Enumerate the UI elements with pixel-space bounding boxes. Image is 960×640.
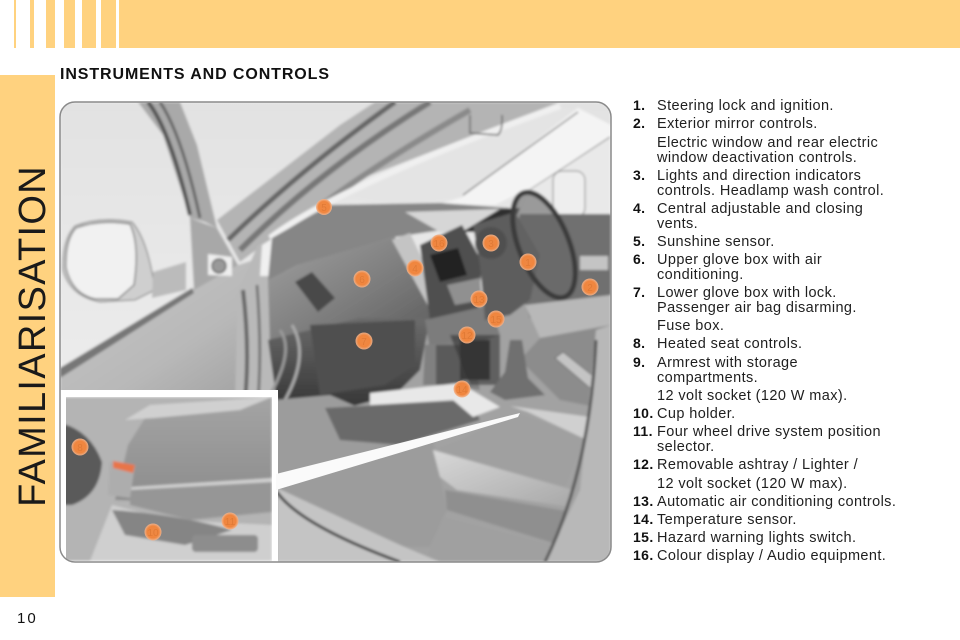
inset: seat belt buckle — [108, 461, 135, 498]
marker 1 — [520, 254, 536, 270]
legend: numbered list of controls: Armrest with storage — [657, 355, 798, 371]
strip beside display — [391, 232, 430, 306]
legend: numbered list of controls: 7. — [633, 284, 645, 300]
legend: numbered list of controls: Temperature sensor. — [657, 512, 797, 528]
legend: numbered list of controls: 13. — [633, 493, 654, 509]
marker 5: 5 — [321, 203, 327, 214]
door frame strip — [235, 246, 275, 390]
legend: numbered list of controls: 6. — [633, 251, 645, 267]
page number: 10 — [17, 610, 38, 627]
illustration: car interior — [59, 101, 612, 563]
door panel — [60, 260, 252, 390]
legend: numbered list of controls: 4. — [633, 200, 645, 216]
white beam from inset — [276, 413, 520, 490]
steering column — [473, 212, 540, 320]
legend: numbered list of controls: Exterior mirror controls. — [657, 116, 818, 132]
legend: numbered list of controls: vents. — [657, 216, 698, 232]
legend: numbered list of controls: conditioning. — [657, 267, 744, 283]
marker 7: 7 — [361, 337, 367, 348]
title: INSTRUMENTS AND CONTROLS — [60, 66, 330, 83]
marker 2: 2 — [587, 283, 593, 294]
marker 8: 8 — [77, 443, 83, 454]
far side window and mirror — [530, 157, 586, 215]
header band with stripes — [14, 0, 960, 48]
legend: numbered list of controls: 5. — [633, 233, 645, 249]
legend: numbered list of controls: Removable ashtray / Lighter / — [657, 457, 858, 473]
inset: console with cup holder — [90, 505, 272, 561]
roof pillar — [217, 102, 560, 262]
illustration frame — [60, 102, 611, 562]
door pillar — [138, 102, 238, 290]
legend: numbered list of controls: Lower glove box with lock. — [657, 285, 837, 301]
interior base tone — [270, 300, 611, 562]
marker 3: 3 — [488, 239, 494, 250]
rear view mirror — [470, 115, 502, 135]
marker 12 — [458, 326, 476, 344]
legend: numbered list of controls: Steering lock and ignition. — [657, 98, 834, 114]
seat back area — [433, 413, 585, 487]
outside view background — [60, 102, 610, 366]
sidebar with section name — [0, 75, 55, 597]
marker 16: 16 — [433, 239, 445, 250]
marker 10 — [144, 524, 162, 540]
legend: numbered list of controls: Electric window and rear electric — [657, 135, 878, 151]
legend: numbered list of controls: Hazard warning lights switch. — [657, 530, 856, 546]
legend: numbered list of controls: window deactivation controls. — [657, 150, 857, 166]
marker 15: 15 — [490, 315, 502, 326]
marker 2 — [582, 278, 598, 296]
dashboard top — [268, 203, 510, 280]
marker 4 — [406, 260, 424, 276]
legend: numbered list of controls: 1. — [633, 97, 645, 113]
seat cushion — [433, 450, 573, 543]
marker 13 — [470, 290, 488, 308]
marker 14 — [454, 380, 470, 398]
glove box upper — [268, 237, 435, 345]
legend: numbered list of controls: controls. Headlamp wash control. — [657, 183, 884, 199]
steering wheel — [510, 188, 579, 301]
marker 16 — [430, 234, 448, 252]
marker 11 — [222, 512, 238, 530]
footwell console — [325, 335, 500, 445]
lower dash — [267, 319, 428, 407]
central stack — [420, 225, 500, 390]
inset: armrest close-up — [60, 397, 272, 561]
marker 5 — [316, 199, 332, 215]
legend: numbered list of controls: Four wheel drive system position — [657, 424, 881, 440]
legend: numbered list of controls: 14. — [633, 511, 654, 527]
inset: steering wheel rim — [60, 423, 102, 505]
marker 8 — [72, 438, 88, 456]
legend: numbered list of controls: 2. — [633, 115, 645, 131]
legend: numbered list of controls: Automatic air conditioning controls. — [657, 494, 896, 510]
legend: numbered list of controls: 3. — [633, 167, 645, 183]
legend: numbered list of controls: Sunshine sensor. — [657, 234, 775, 250]
legend: numbered list of controls: Passenger air bag disarming. — [657, 300, 857, 316]
legend: numbered list of controls: Fuse box. — [657, 318, 724, 334]
legend: numbered list of controls — [633, 97, 896, 564]
marker 3 — [482, 234, 500, 252]
legend: numbered list of controls: 15. — [633, 529, 654, 545]
legend: numbered list of controls: 11. — [633, 423, 653, 439]
marker 1: 1 — [525, 258, 531, 269]
legend: numbered list of controls: 16. — [633, 547, 654, 563]
legend: numbered list of controls: Lights and direction indicators — [657, 168, 861, 184]
legend: numbered list of controls: 9. — [633, 354, 645, 370]
sill left — [277, 488, 440, 562]
marker 15 — [488, 310, 504, 328]
legend: numbered list of controls: 12 volt socket (120 W max). — [657, 388, 848, 404]
legend: numbered list of controls: Heated seat controls. — [657, 336, 802, 352]
marker 11: 11 — [225, 517, 236, 528]
exterior mirror — [63, 220, 186, 302]
marker 14: 14 — [456, 385, 468, 396]
legend: numbered list of controls: selector. — [657, 439, 715, 455]
carpet — [278, 394, 355, 421]
legend: numbered list of controls: 12 volt socket (120 W max). — [657, 476, 848, 492]
legend: numbered list of controls: 12. — [633, 456, 654, 472]
marker 6: 6 — [359, 275, 365, 286]
armrest top — [510, 406, 590, 440]
marker 6 — [354, 270, 370, 288]
handbrake — [556, 352, 593, 388]
legend: numbered list of controls: compartments. — [657, 370, 758, 386]
sill right — [545, 325, 611, 562]
windshield — [340, 108, 578, 205]
right pillar — [440, 108, 611, 205]
marker 12: 12 — [461, 331, 473, 342]
legend: numbered list of controls: Cup holder. — [657, 406, 736, 422]
vent — [295, 272, 335, 312]
legend: numbered list of controls: Upper glove box with air — [657, 252, 822, 268]
marker 13: 13 — [473, 295, 485, 306]
marker 10: 10 — [147, 528, 159, 539]
legend: numbered list of controls: 8. — [633, 335, 645, 351]
gear lever — [490, 340, 545, 400]
far door — [510, 214, 611, 410]
legend: numbered list of controls: 10. — [633, 405, 654, 421]
legend: numbered list of controls: Colour display / Audio equipment. — [657, 548, 886, 564]
marker 4: 4 — [412, 264, 418, 275]
section name: Familiarisation: FAMILIARISATION — [12, 165, 54, 507]
inset: white frame — [60, 390, 278, 562]
marker 7 — [356, 332, 372, 350]
seat base floor — [425, 517, 552, 562]
legend: numbered list of controls: Central adjustable and closing — [657, 201, 863, 217]
